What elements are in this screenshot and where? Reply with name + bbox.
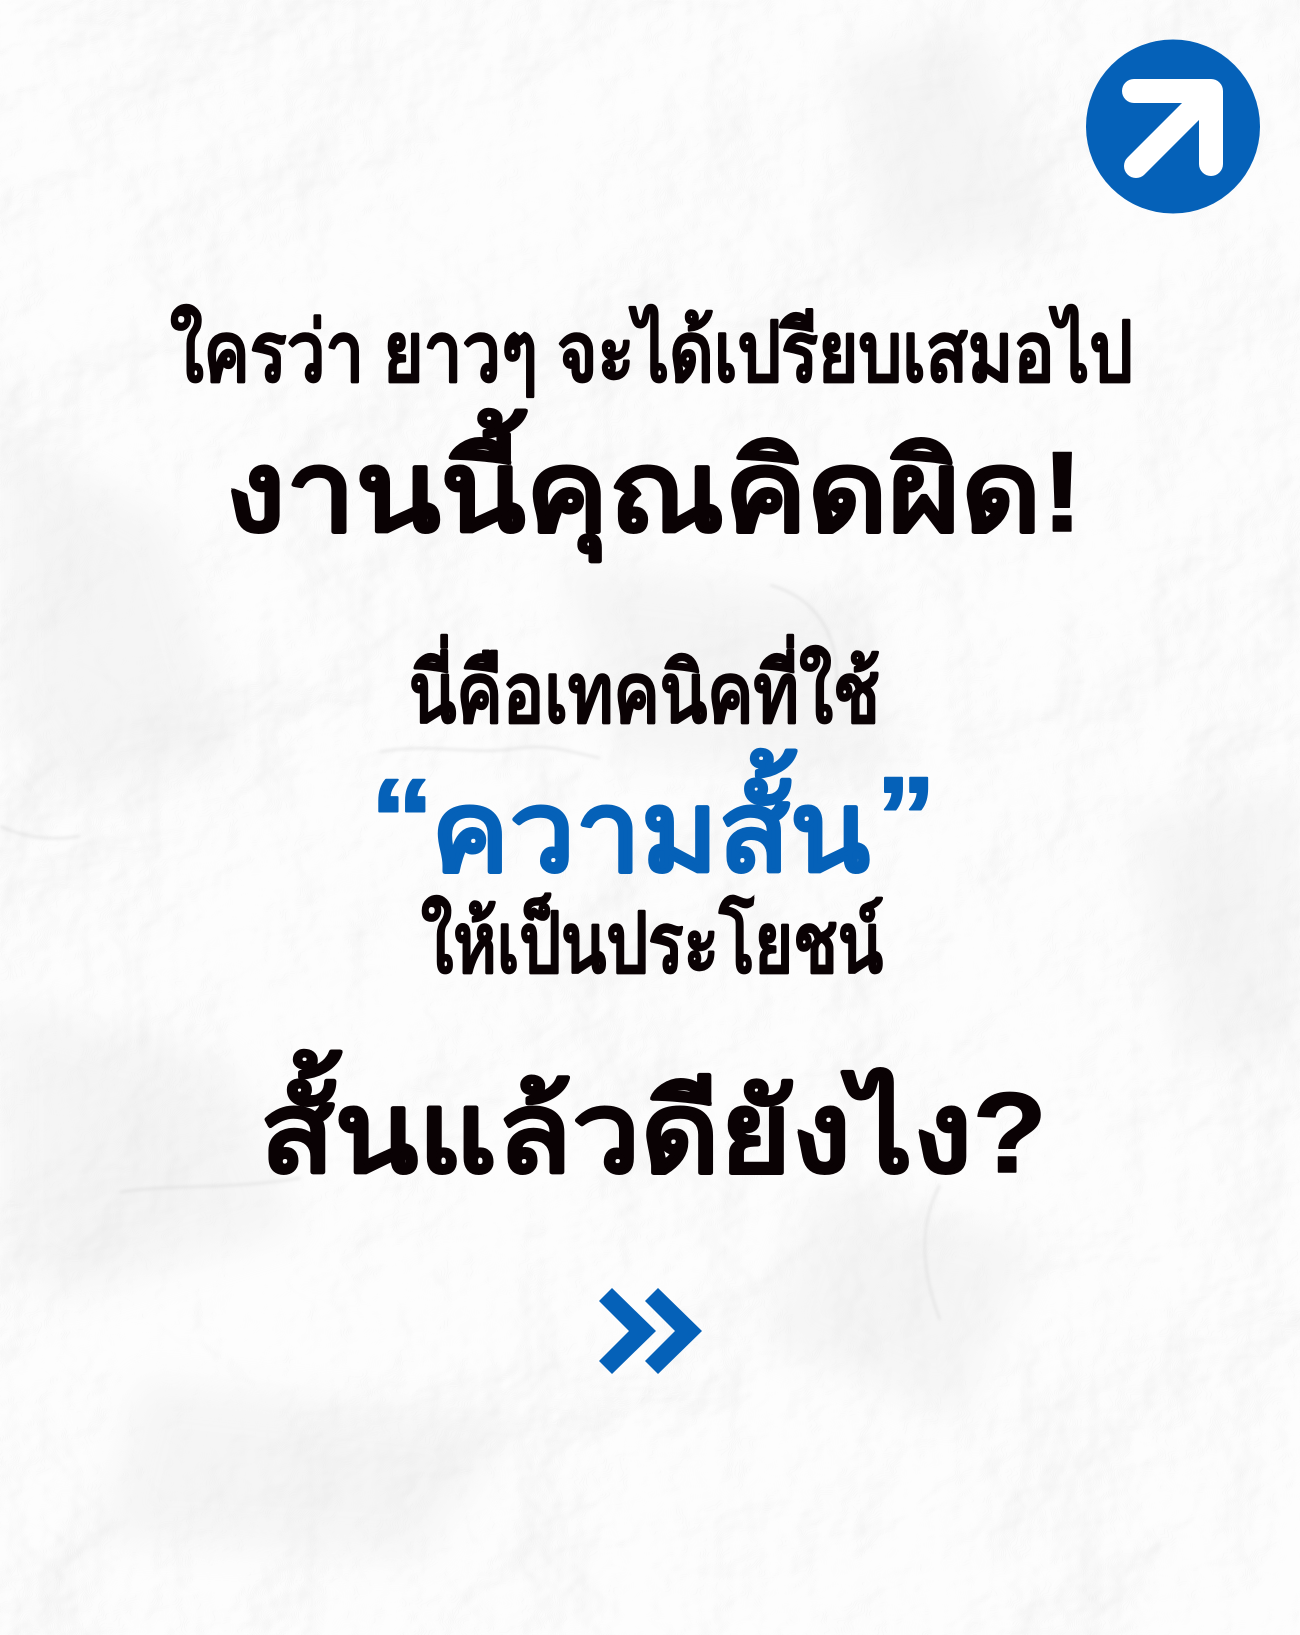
highlighted keyword: “ความสั้น”: ความสั้น: [431, 748, 870, 896]
text line: นี่คือเทคนิคที่ใช้: นี่คือเทคนิคที่ใช้: [409, 634, 880, 740]
highlighted keyword: “ความสั้น”: [370, 748, 936, 896]
text line: ให้เป็นประโยชน์: ให้เป็นประโยชน์: [421, 892, 884, 990]
highlighted keyword: “ความสั้น”: ”: [876, 754, 936, 879]
icon: double chevron next arrow: [599, 1288, 702, 1374]
question headline: สั้นแล้วดียังไง?: สั้นแล้วดียังไง?: [260, 1049, 1047, 1197]
highlighted keyword: “ความสั้น”: “: [370, 756, 434, 881]
headline: งานนี้คุณคิดผิด!: งานนี้คุณคิดผิด!: [225, 408, 1083, 563]
icon: blue circle with up-right arrow: [1086, 40, 1260, 214]
